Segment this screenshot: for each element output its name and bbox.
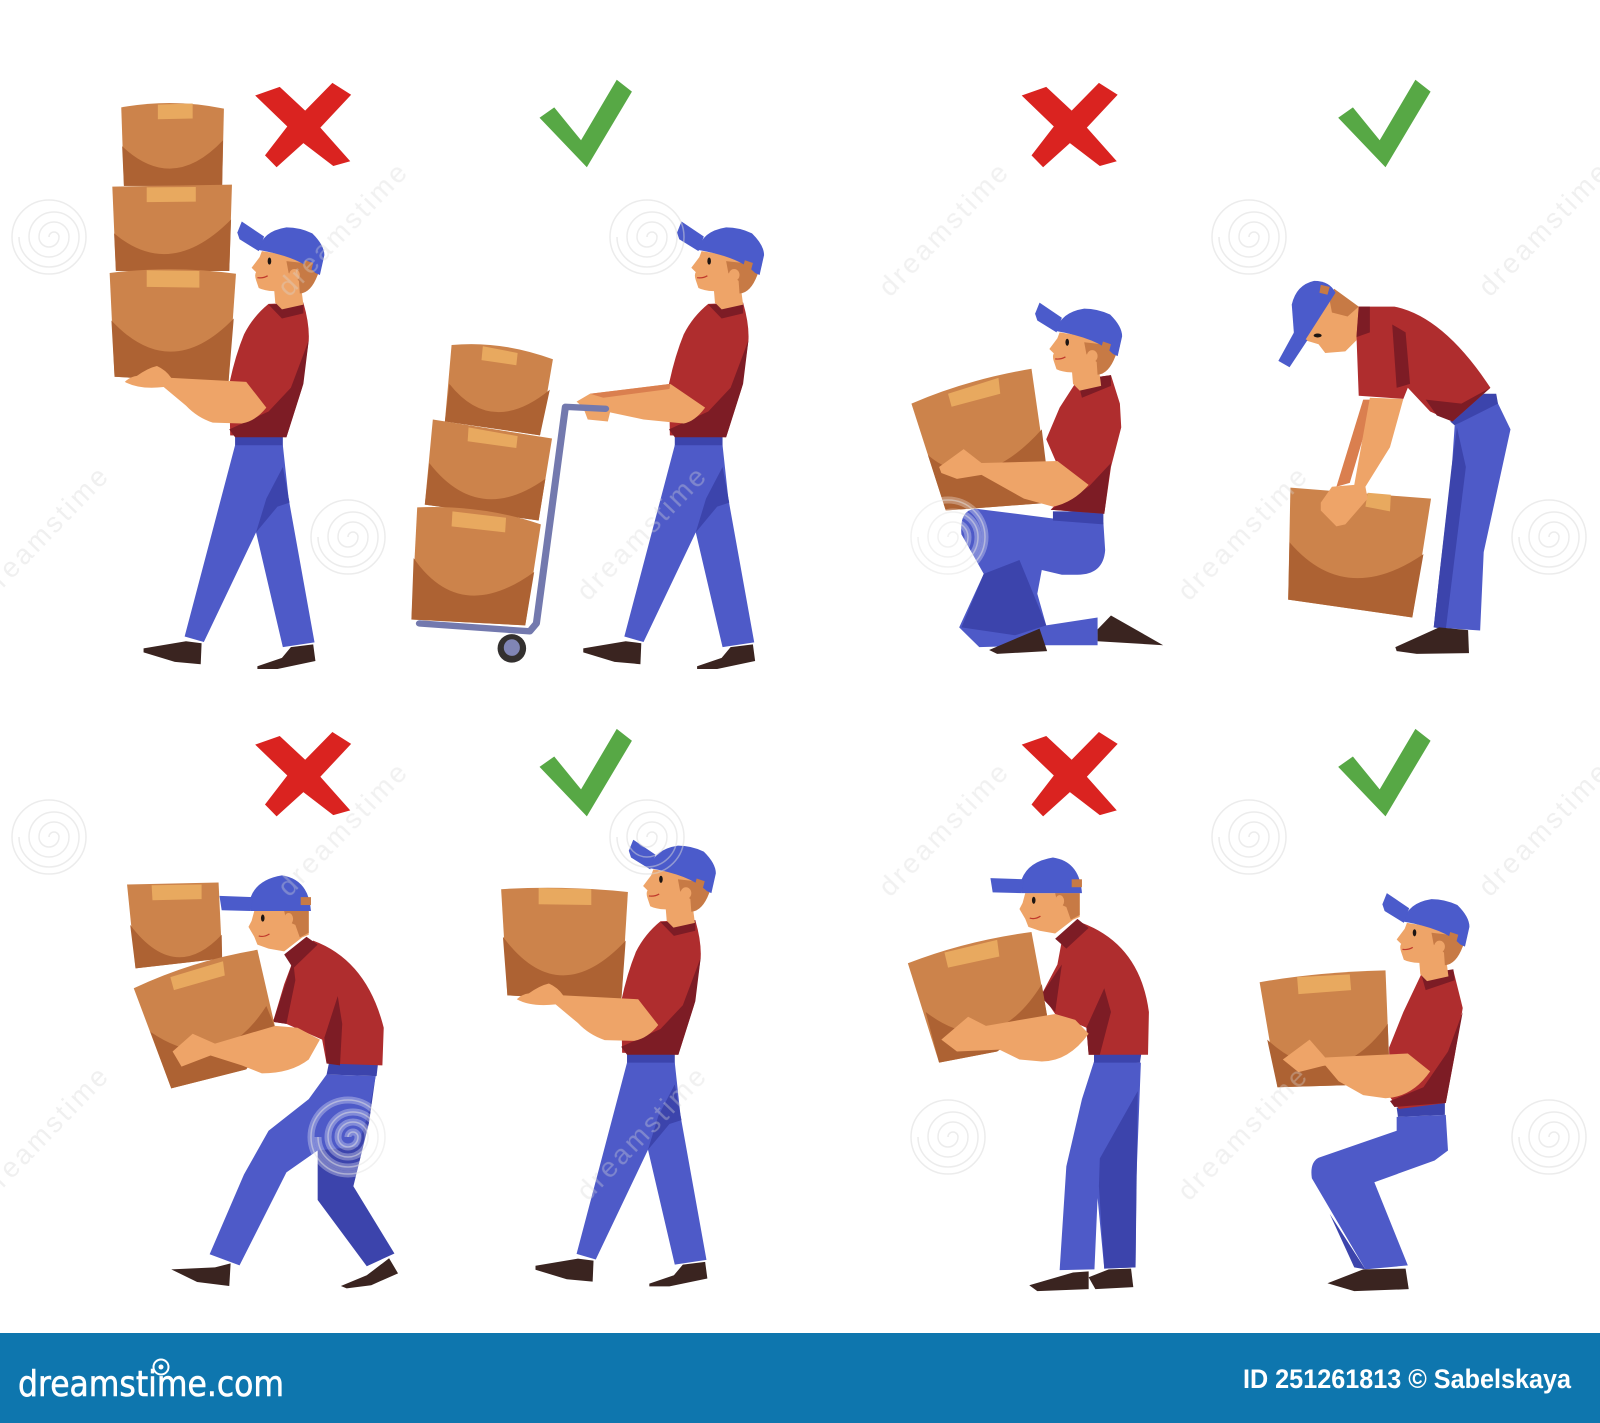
worker stooping with two boxes [127,875,398,1288]
icon: green check, right [1338,729,1431,816]
watermark overlay: dreamstime [872,757,1014,902]
watermark overlay: dreamstime [1171,461,1313,606]
icon: red cross, wrong [1022,732,1118,816]
worker pushing hand cart with three boxes [411,221,764,669]
watermark overlay: dreamstime [271,157,413,302]
icon: red cross, wrong [1022,83,1118,167]
worker bending over to lift box [1278,281,1510,654]
watermark overlay: dreamstime [872,157,1014,302]
worker kneeling and holding box [911,303,1163,654]
worker carrying three stacked boxes [110,103,324,669]
footer credit: ID 251261813 © Sabelskaya [1243,1364,1572,1394]
icon: red cross, wrong [255,83,351,167]
worker squatting with box close to body [1260,893,1469,1291]
icon: green check, right [1338,80,1431,167]
worker leaning forward with box away from body [908,858,1149,1291]
worker carrying one box upright [501,840,716,1286]
watermark overlay: dreamstime [570,461,712,606]
icon: green check, right [540,80,632,167]
panel: carrying too many boxes versus using a hand cart [110,80,764,669]
watermark overlay [0,157,1600,1206]
watermark overlay: dreamstime [271,757,413,902]
icon: red cross, wrong [255,732,351,816]
panel: kneeling lift versus bending over box [911,80,1510,654]
panel: leaning forward versus squatting with box [908,729,1469,1291]
footer band [0,1333,1600,1423]
icon: green check, right [540,729,632,816]
watermark overlay: dreamstime [1171,1061,1313,1206]
panel: two boxes blocking view versus single box [127,729,716,1288]
footer logo: dreamstime.com [18,1364,284,1405]
watermark overlay: dreamstime [570,1061,712,1206]
